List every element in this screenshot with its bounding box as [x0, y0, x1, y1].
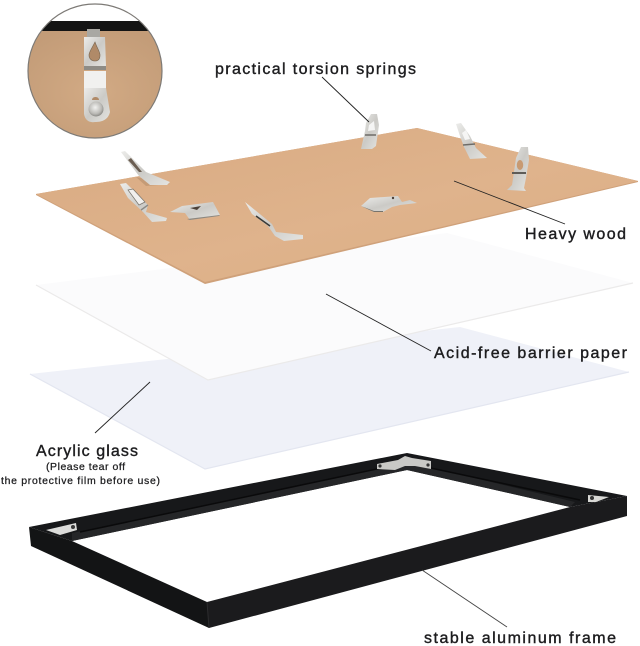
panel: heavy wood backing board	[36, 128, 638, 284]
icon: torsion spring 3	[245, 202, 303, 241]
leader line: springs	[322, 77, 369, 122]
icon: corner bracket left	[46, 523, 77, 535]
label: acid-free barrier paper: Acid-free barrier paper	[434, 345, 628, 362]
label: tear-off note line 1: (Please tear off	[46, 461, 125, 473]
leader line: frame	[422, 570, 507, 627]
icon: torsion spring 2	[120, 183, 167, 222]
icon: corner bracket right	[588, 495, 609, 502]
label: tear-off note line 2: the protective film before use)	[1, 475, 160, 487]
icon: flat clip 2	[361, 196, 417, 212]
icon: torsion spring 5	[456, 123, 487, 159]
frame back rails	[29, 453, 627, 541]
label: acrylic glass: Acrylic glass	[36, 443, 138, 460]
panel: acid-free barrier paper	[36, 233, 633, 380]
leader line: paper	[326, 294, 431, 351]
inset: hanging spring close-up	[20, 4, 170, 141]
icon: flat clip 1	[170, 202, 220, 220]
frame front right rail	[207, 496, 627, 628]
leader line: acrylic	[95, 382, 150, 433]
panel: acrylic glass sheet	[30, 327, 629, 469]
icon: torsion spring 4	[361, 114, 379, 149]
icon: corner bracket top	[377, 456, 431, 470]
label: heavy wood: Heavy wood	[525, 226, 626, 243]
leader line: wood	[454, 181, 565, 224]
icon: torsion spring 6	[507, 147, 529, 191]
label: practical torsion springs: practical torsion springs	[215, 61, 416, 78]
frame front left rail	[29, 527, 209, 628]
panel: aluminum frame	[29, 453, 627, 628]
icon: torsion spring 1	[121, 151, 170, 186]
